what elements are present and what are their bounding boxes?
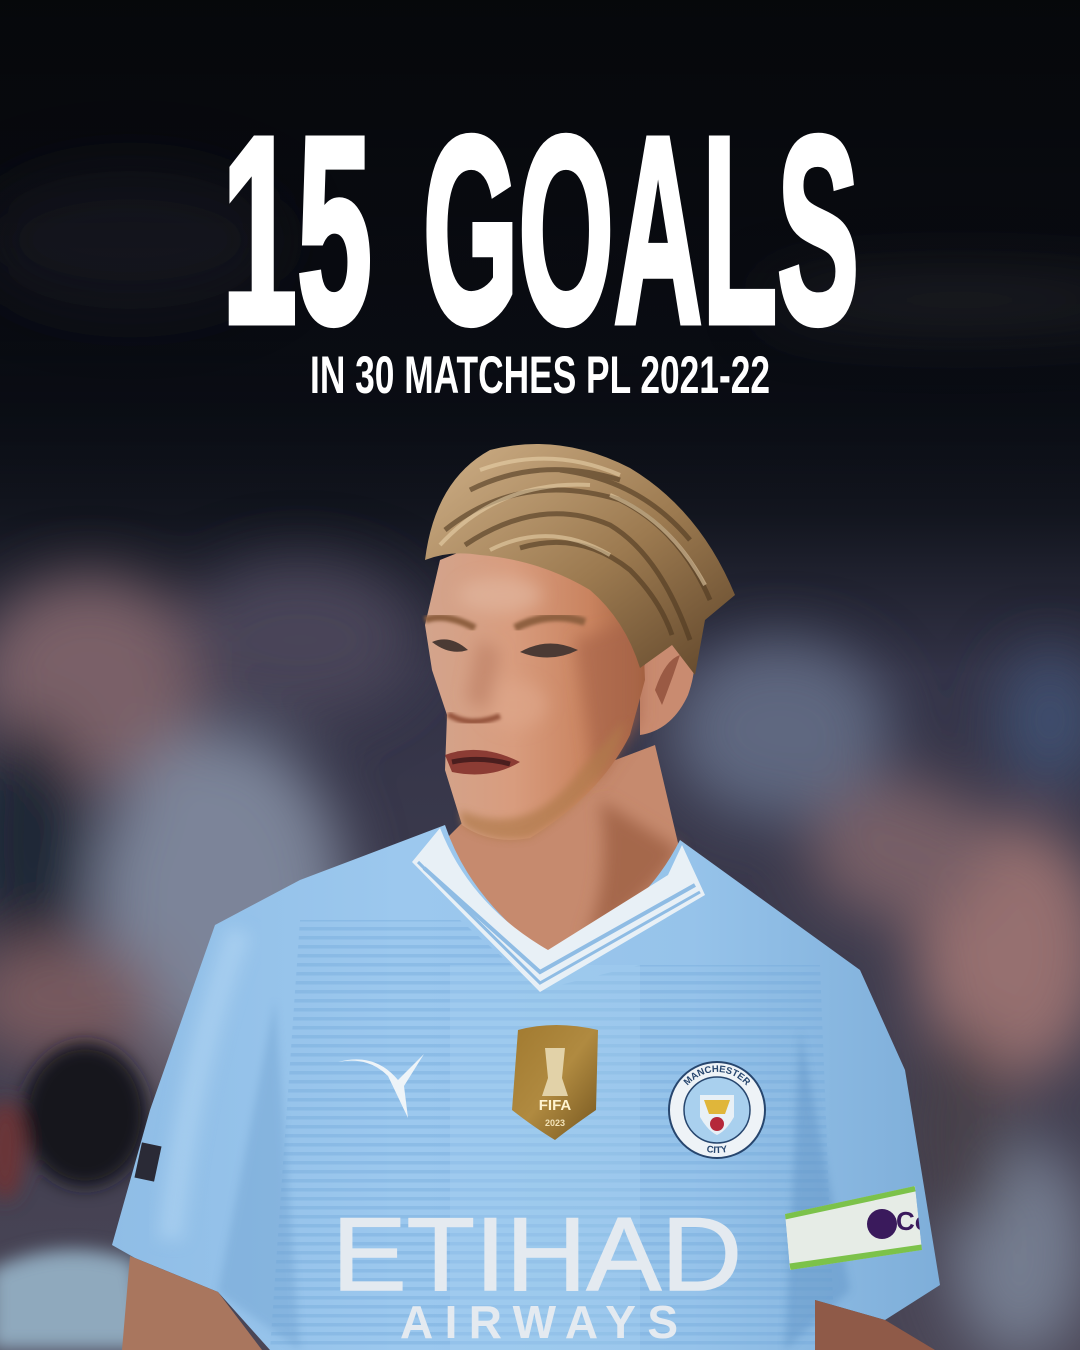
FIFA badge: FIFA — [539, 1097, 571, 1114]
Manchester City crest: MANCHESTER — [683, 1065, 750, 1086]
FIFA badge — [512, 1025, 598, 1140]
brows and eyes — [425, 617, 475, 628]
sleeve patch — [134, 1142, 162, 1182]
Manchester City crest — [668, 1061, 766, 1159]
captain armband: Co — [896, 1206, 931, 1236]
headline — [222, 82, 859, 379]
dark top fade — [0, 0, 1080, 500]
sponsor wordmark: AIRWAYS — [400, 1296, 678, 1348]
FIFA badge: 2023 — [545, 1118, 565, 1128]
arm right — [815, 1300, 935, 1350]
puma logo — [338, 1054, 424, 1118]
hair — [425, 444, 735, 675]
subheading: IN 30 MATCHES PL 2021-22 — [310, 346, 770, 405]
stubble — [460, 720, 625, 840]
headline: 15 — [222, 82, 372, 379]
face shading — [458, 577, 640, 785]
jersey — [112, 825, 940, 1350]
face — [425, 520, 645, 840]
ear — [640, 635, 694, 735]
neck — [445, 745, 682, 965]
collar — [412, 828, 705, 992]
captain armband — [785, 1186, 931, 1270]
player figure — [112, 444, 940, 1350]
nose and mouth — [448, 714, 500, 722]
Manchester City crest: CITY — [707, 1145, 726, 1153]
sponsor wordmark: ETIHAD — [332, 1197, 742, 1313]
arm left — [122, 1256, 262, 1350]
